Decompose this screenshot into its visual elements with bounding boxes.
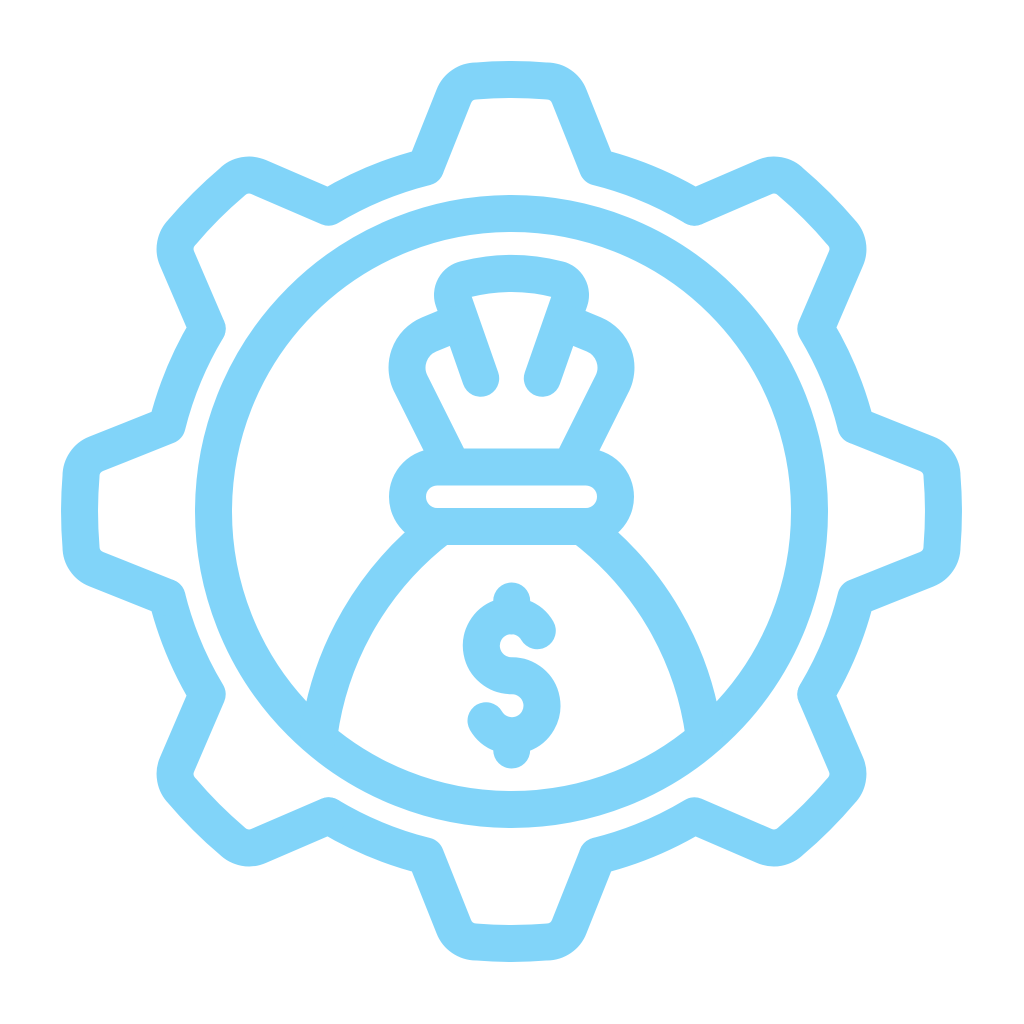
icon: inner circle	[214, 214, 810, 810]
icon: gear outline	[77, 77, 946, 946]
bag body right side	[583, 527, 704, 735]
dollar sign	[481, 601, 542, 750]
bag knot top	[452, 274, 571, 378]
bag body left side	[319, 527, 440, 735]
bag right ear	[571, 325, 616, 466]
bag left ear	[407, 325, 452, 466]
bag collar	[408, 467, 616, 526]
icon: money bag	[319, 274, 704, 750]
